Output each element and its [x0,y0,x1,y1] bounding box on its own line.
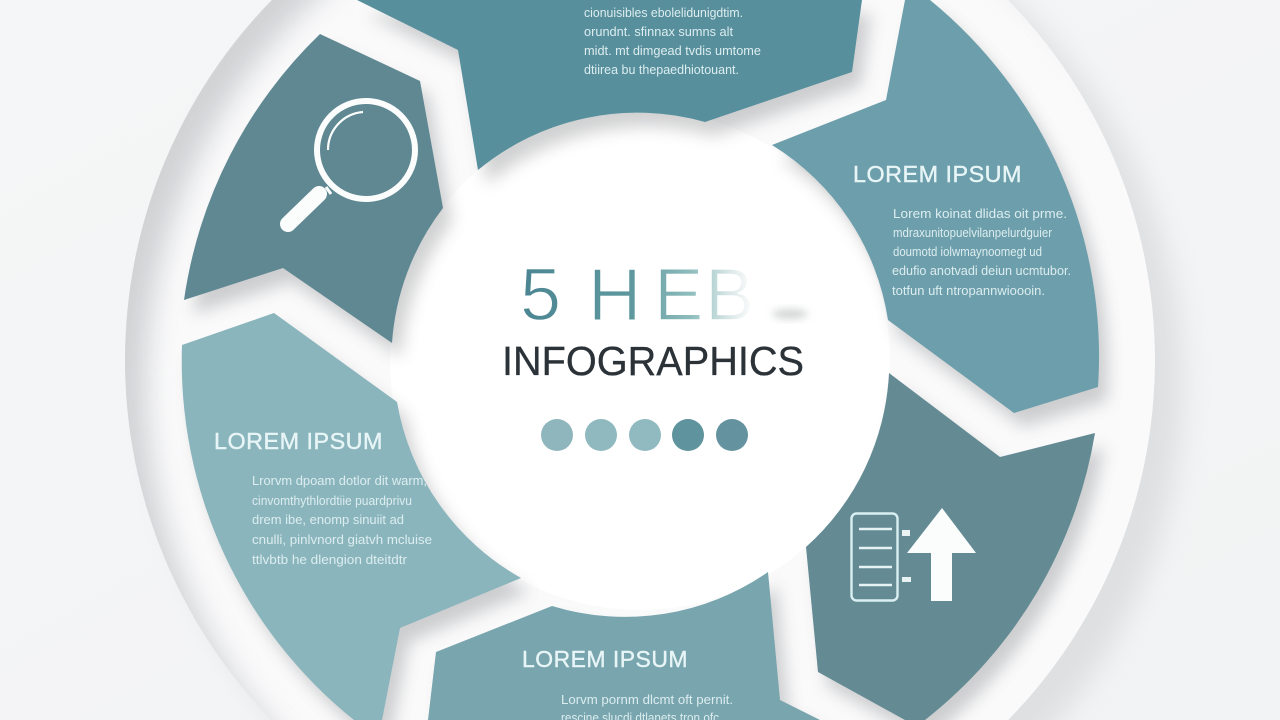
bottom text: Lorvm pornm dlcmt oft pernit. [561,693,733,707]
top segment text [584,6,761,77]
lower left text: cinvomthythlordtiie puardprivu [252,494,412,508]
panel: upper left segment [184,34,443,343]
top segment text: midt. mt dimgead tvdis umtome [584,44,761,58]
panel: lower left segment [182,313,521,720]
top segment text: orundnt. sfinnax sumns alt [584,25,734,39]
lower left text: drem ibe, enomp sinuiit ad [252,513,404,527]
icon: magnifying glass [288,101,415,224]
subtitle: INFOGRAPHICS: INFOGRAPHICS [502,338,804,384]
upper right text [892,207,1071,298]
title: 5 HEB: 5HEB [520,253,754,336]
upper right text: Lorem koinat dlidas oit prme. [893,207,1067,221]
upper right heading: LOREM IPSUM [853,161,1022,187]
lower left text: Lrorvm dpoam dotlor dit warm, [252,474,427,488]
bottom heading: LOREM IPSUM [522,646,688,672]
lower left text: cnulli, pinlvnord giatvh mcluise [252,533,432,547]
top segment text: dtiirea bu thepaedhiotouant. [584,63,739,77]
upper right text: totfun uft ntropannwioooin. [892,284,1045,298]
dots row [541,419,748,451]
upper right text: doumotd iolwmaynoomegt ud [893,245,1042,259]
icon: up arrow [907,508,976,601]
lower left heading: LOREM IPSUM [214,428,383,454]
icon: document checklist [852,514,911,600]
upper right text: mdraxunitopuelvilanpelurdguier [893,226,1052,240]
panel: upper right segment [772,0,1099,413]
panel: lower right segment [806,373,1095,720]
center disc [390,110,890,610]
lower left text [252,474,432,567]
lower left text: ttlvbtb he dlengion dteitdtr [252,553,407,567]
panel: center title [502,253,808,451]
bottom text [561,693,733,720]
upper right text: edufio anotvadi deiun ucmtubor. [892,264,1071,278]
top segment text: cionuisibles ebolelidunigdtim. [584,6,743,20]
panel: top segment [357,0,862,170]
panel: bottom segment [428,572,820,720]
